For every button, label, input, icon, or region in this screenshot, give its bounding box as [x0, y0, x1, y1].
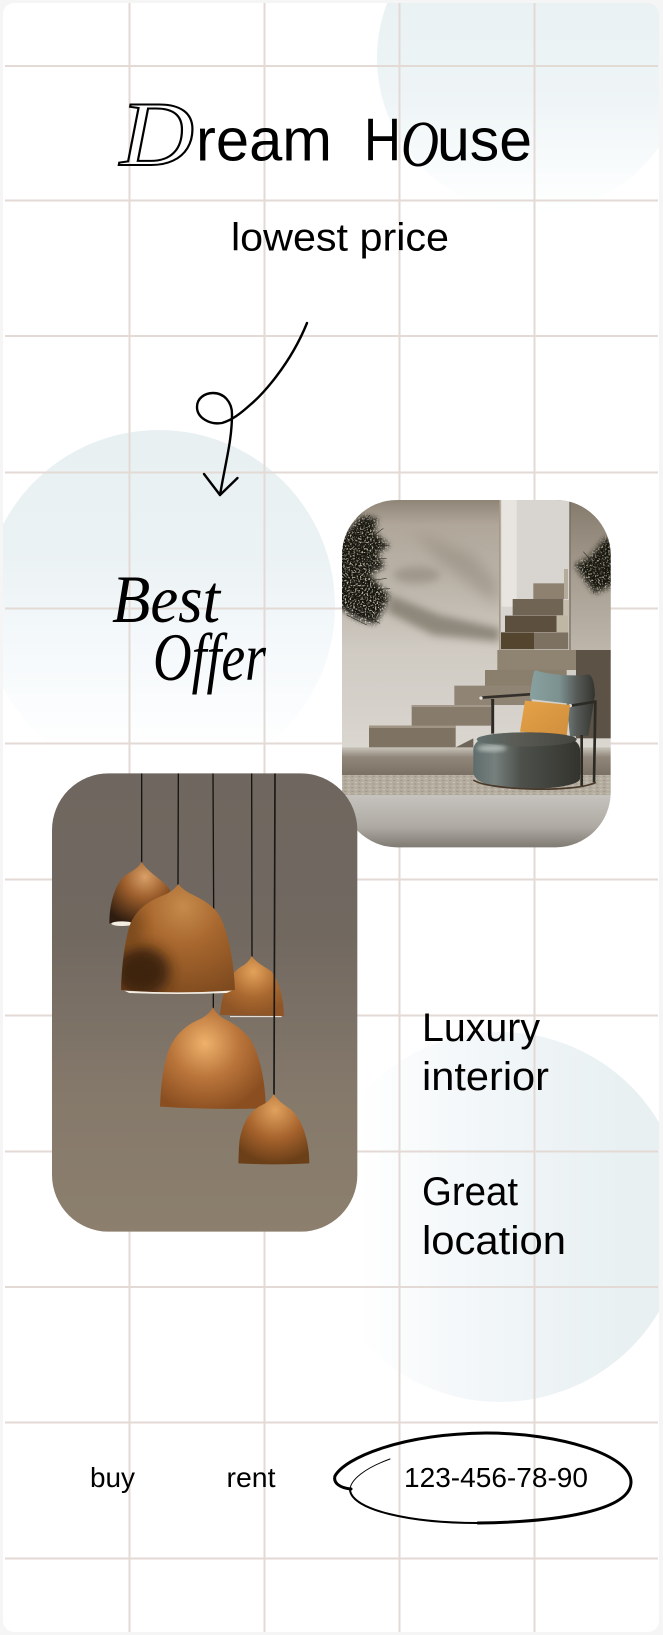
feature text: luxury interior: Luxury: [422, 1006, 540, 1050]
title: use: [437, 106, 532, 174]
feature text: great location: Great: [422, 1170, 518, 1214]
lamp: large: [113, 884, 235, 997]
lamp: back right: [220, 956, 284, 1017]
lamp: front centre: [160, 1007, 266, 1109]
title: D: [118, 83, 194, 185]
plant right: [575, 538, 620, 593]
footer link: rent: rent: [226, 1462, 276, 1493]
photo: copper pendant lamps: [50, 772, 360, 1234]
photo: staircase and armchair: [333, 500, 620, 848]
feature text: luxury interior: interior: [422, 1055, 549, 1099]
lamp: back left: [109, 862, 170, 926]
title: H: [364, 106, 401, 174]
long cord: [274, 773, 275, 1095]
footer link: buy: buy: [90, 1462, 135, 1493]
script text: Best Offer: Best: [112, 561, 222, 637]
title: ream: [196, 106, 332, 174]
stair steps: [369, 569, 576, 747]
script text: Best Offer: [112, 561, 266, 695]
feature text: luxury interior: [422, 1006, 549, 1099]
lamp cords: [142, 773, 252, 1008]
phone number: 123-456-78-90: [404, 1462, 588, 1493]
icon: hand-drawn loop arrow: [197, 323, 307, 495]
feature text: great location: location: [422, 1219, 566, 1263]
title: O: [401, 108, 439, 181]
script text: Best Offer: Offer: [153, 619, 266, 695]
feature text: great location: [422, 1170, 566, 1263]
subtitle: lowest price: [231, 216, 449, 260]
hand-drawn ellipse around phone number: [335, 1433, 631, 1523]
armchair: [473, 670, 596, 789]
lamp: bottom right: [238, 1094, 309, 1164]
plant left: [333, 515, 390, 625]
title: [118, 83, 532, 185]
